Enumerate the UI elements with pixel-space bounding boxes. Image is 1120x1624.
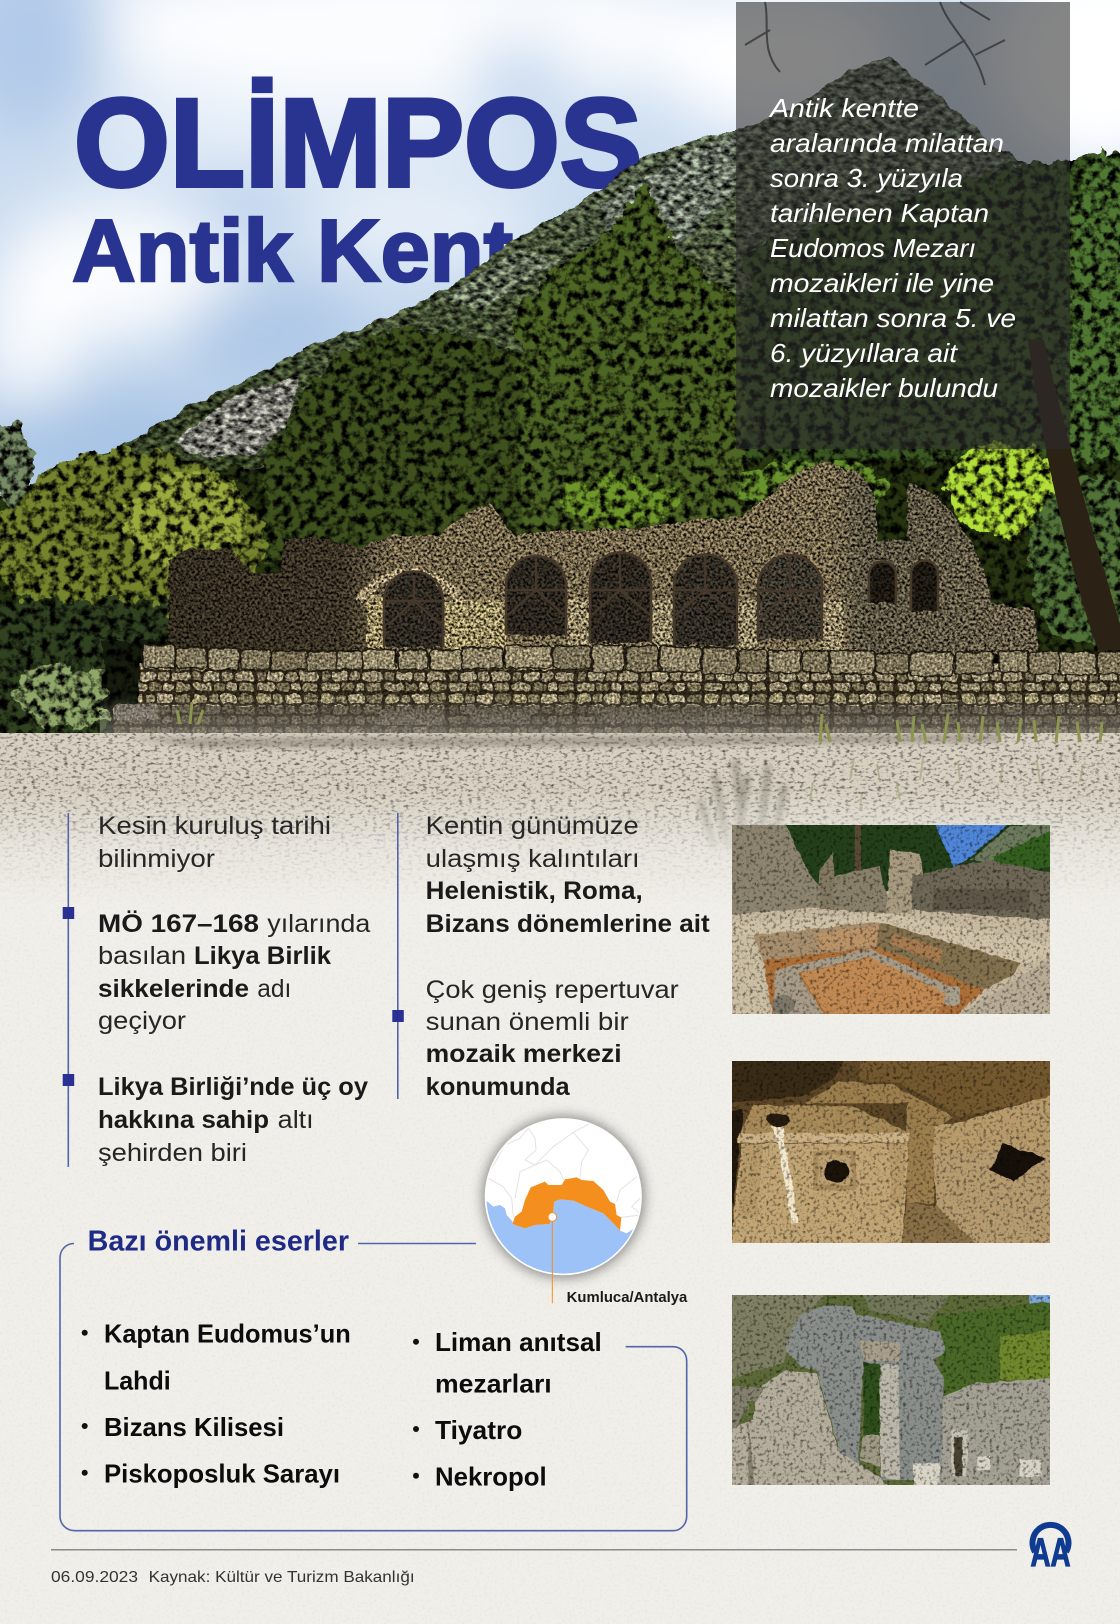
- panel text: mozaikler bulundu: [770, 373, 998, 403]
- text block: mosaic centre: mozaik merkezi: [426, 1040, 622, 1068]
- hero photo: reeds and shrubs: [0, 600, 170, 750]
- shrub on the ground: [700, 760, 785, 850]
- hero photo: sky background: [0, 0, 1120, 560]
- footer: date and source: Kaynak: Kültür ve Turizm Bakanlığı: [149, 1569, 415, 1586]
- Antalya province: [512, 1177, 621, 1231]
- list: works column 1: [82, 1319, 351, 1489]
- panel text: milattan sonra 5. ve: [770, 303, 1016, 333]
- text block: periods of the remains: Helenistik, Roma,: [426, 877, 643, 905]
- ground: gravel: [0, 702, 1120, 923]
- panel text: tarihlenen Kaptan: [770, 198, 989, 228]
- panel text: [768, 93, 1016, 403]
- arch windows: [384, 552, 938, 647]
- hero photo: ruined wall with arches: [100, 460, 1120, 740]
- list frame: [60, 1244, 687, 1531]
- text block: Lycian League coins: Likya Birlik: [194, 942, 331, 970]
- logo: AA: [1030, 1525, 1070, 1575]
- sea: [486, 1200, 633, 1274]
- panel text: mozaikleri ile yine: [770, 268, 994, 298]
- text block: Lycian League coins: [98, 909, 370, 1035]
- timeline marker 2: [63, 1074, 74, 1086]
- text block: periods of the remains: Kentin günümüze: [426, 812, 639, 840]
- list: works column 2: mezarları: [435, 1368, 552, 1398]
- panel text: Eudomos Mezarı: [770, 233, 976, 263]
- lower stone wall: [114, 645, 1120, 740]
- footer: date and source: [51, 1569, 415, 1586]
- text block: periods of the remains: [426, 812, 710, 938]
- text block: Lycian League coins: MÖ 167–168: [98, 909, 259, 938]
- panel text: sonra 3. yüzyıla: [770, 163, 963, 193]
- neighbouring province borders: [488, 1123, 640, 1217]
- text block: three votes: Likya Birliği’nde üç oy: [98, 1073, 368, 1101]
- grey text panel: [736, 2, 1070, 449]
- text block: mosaic centre: Çok geniş repertuvar: [426, 976, 679, 1004]
- bare branches: [745, 2, 1005, 85]
- pointer line: [551, 1217, 554, 1303]
- panel text: aralarında milattan: [770, 128, 1004, 158]
- photo: sarcophagi: [727, 1057, 1057, 1247]
- list: works column 2: Nekropol: [435, 1462, 547, 1492]
- photo: pool ruins: [727, 820, 1057, 1020]
- list: works column 2: Tiyatro: [435, 1415, 522, 1445]
- hero photo: tree trunk: [1028, 340, 1120, 650]
- list: works column 1: Bizans Kilisesi: [104, 1412, 284, 1442]
- footer rule: [51, 1549, 1017, 1550]
- text block: Lycian League coins: yılarında: [267, 910, 370, 938]
- text block: three votes: [98, 1073, 368, 1167]
- text block: three votes: hakkına sahip: [98, 1106, 269, 1134]
- text block: Lycian League coins: adı: [257, 975, 291, 1003]
- text block: founding date: [98, 812, 331, 873]
- text block: Lycian League coins: sikkelerinde: [98, 975, 249, 1003]
- text block: three votes: altı: [278, 1106, 314, 1134]
- title: OLİMPOS Antik Kent: Antik Kent: [72, 201, 513, 300]
- footer: date and source: 06.09.2023: [51, 1569, 138, 1586]
- text block: three votes: şehirden biri: [98, 1139, 247, 1167]
- list: works column 2: Liman anıtsal: [435, 1327, 602, 1357]
- section heading: Bazı önemli eserler: Bazı önemli eserler: [88, 1226, 349, 1258]
- locator map: Antalya: [460, 1116, 660, 1303]
- text block: Lycian League coins: basılan: [98, 942, 186, 970]
- text block: mosaic centre: konumunda: [426, 1073, 571, 1101]
- text block: periods of the remains: ulaşmış kalıntıları: [426, 845, 640, 873]
- list: works column 1: Piskoposluk Sarayı: [104, 1459, 340, 1489]
- map label: Kumluca/Antalya: [567, 1290, 688, 1306]
- location dot: [548, 1213, 557, 1221]
- middle timeline: [392, 813, 404, 1099]
- title: OLİMPOS Antik Kent: OLİMPOS: [74, 74, 642, 213]
- timeline marker 3: [392, 1010, 404, 1022]
- list: works column 1: Kaptan Eudomus’un: [104, 1319, 351, 1349]
- list: works column 1: Lahdi: [104, 1365, 171, 1395]
- text block: mosaic centre: [426, 976, 679, 1101]
- left timeline: [63, 813, 74, 1167]
- hero photo: mountain: [40, 57, 1120, 600]
- text block: periods of the remains: Bizans dönemlerine ait: [426, 910, 710, 938]
- timeline marker 1: [63, 907, 74, 919]
- title: OLİMPOS Antik Kent: [72, 74, 642, 300]
- text block: founding date: bilinmiyor: [98, 845, 215, 873]
- hero photo: forest and trees: [0, 145, 1120, 760]
- panel text: 6. yüzyıllara ait: [770, 338, 959, 368]
- text block: Lycian League coins: geçiyor: [98, 1007, 186, 1035]
- list: works column 2: [413, 1327, 602, 1492]
- text block: mosaic centre: sunan önemli bir: [426, 1008, 629, 1036]
- wooden window frames: [384, 552, 938, 647]
- text block: founding date: Kesin kuruluş tarihi: [98, 812, 331, 840]
- logo: AA: AA: [1030, 1531, 1070, 1575]
- panel text: Antik kentte: [768, 93, 919, 123]
- photo: gate ruins: [727, 1290, 1057, 1490]
- paper background: [0, 790, 1120, 1624]
